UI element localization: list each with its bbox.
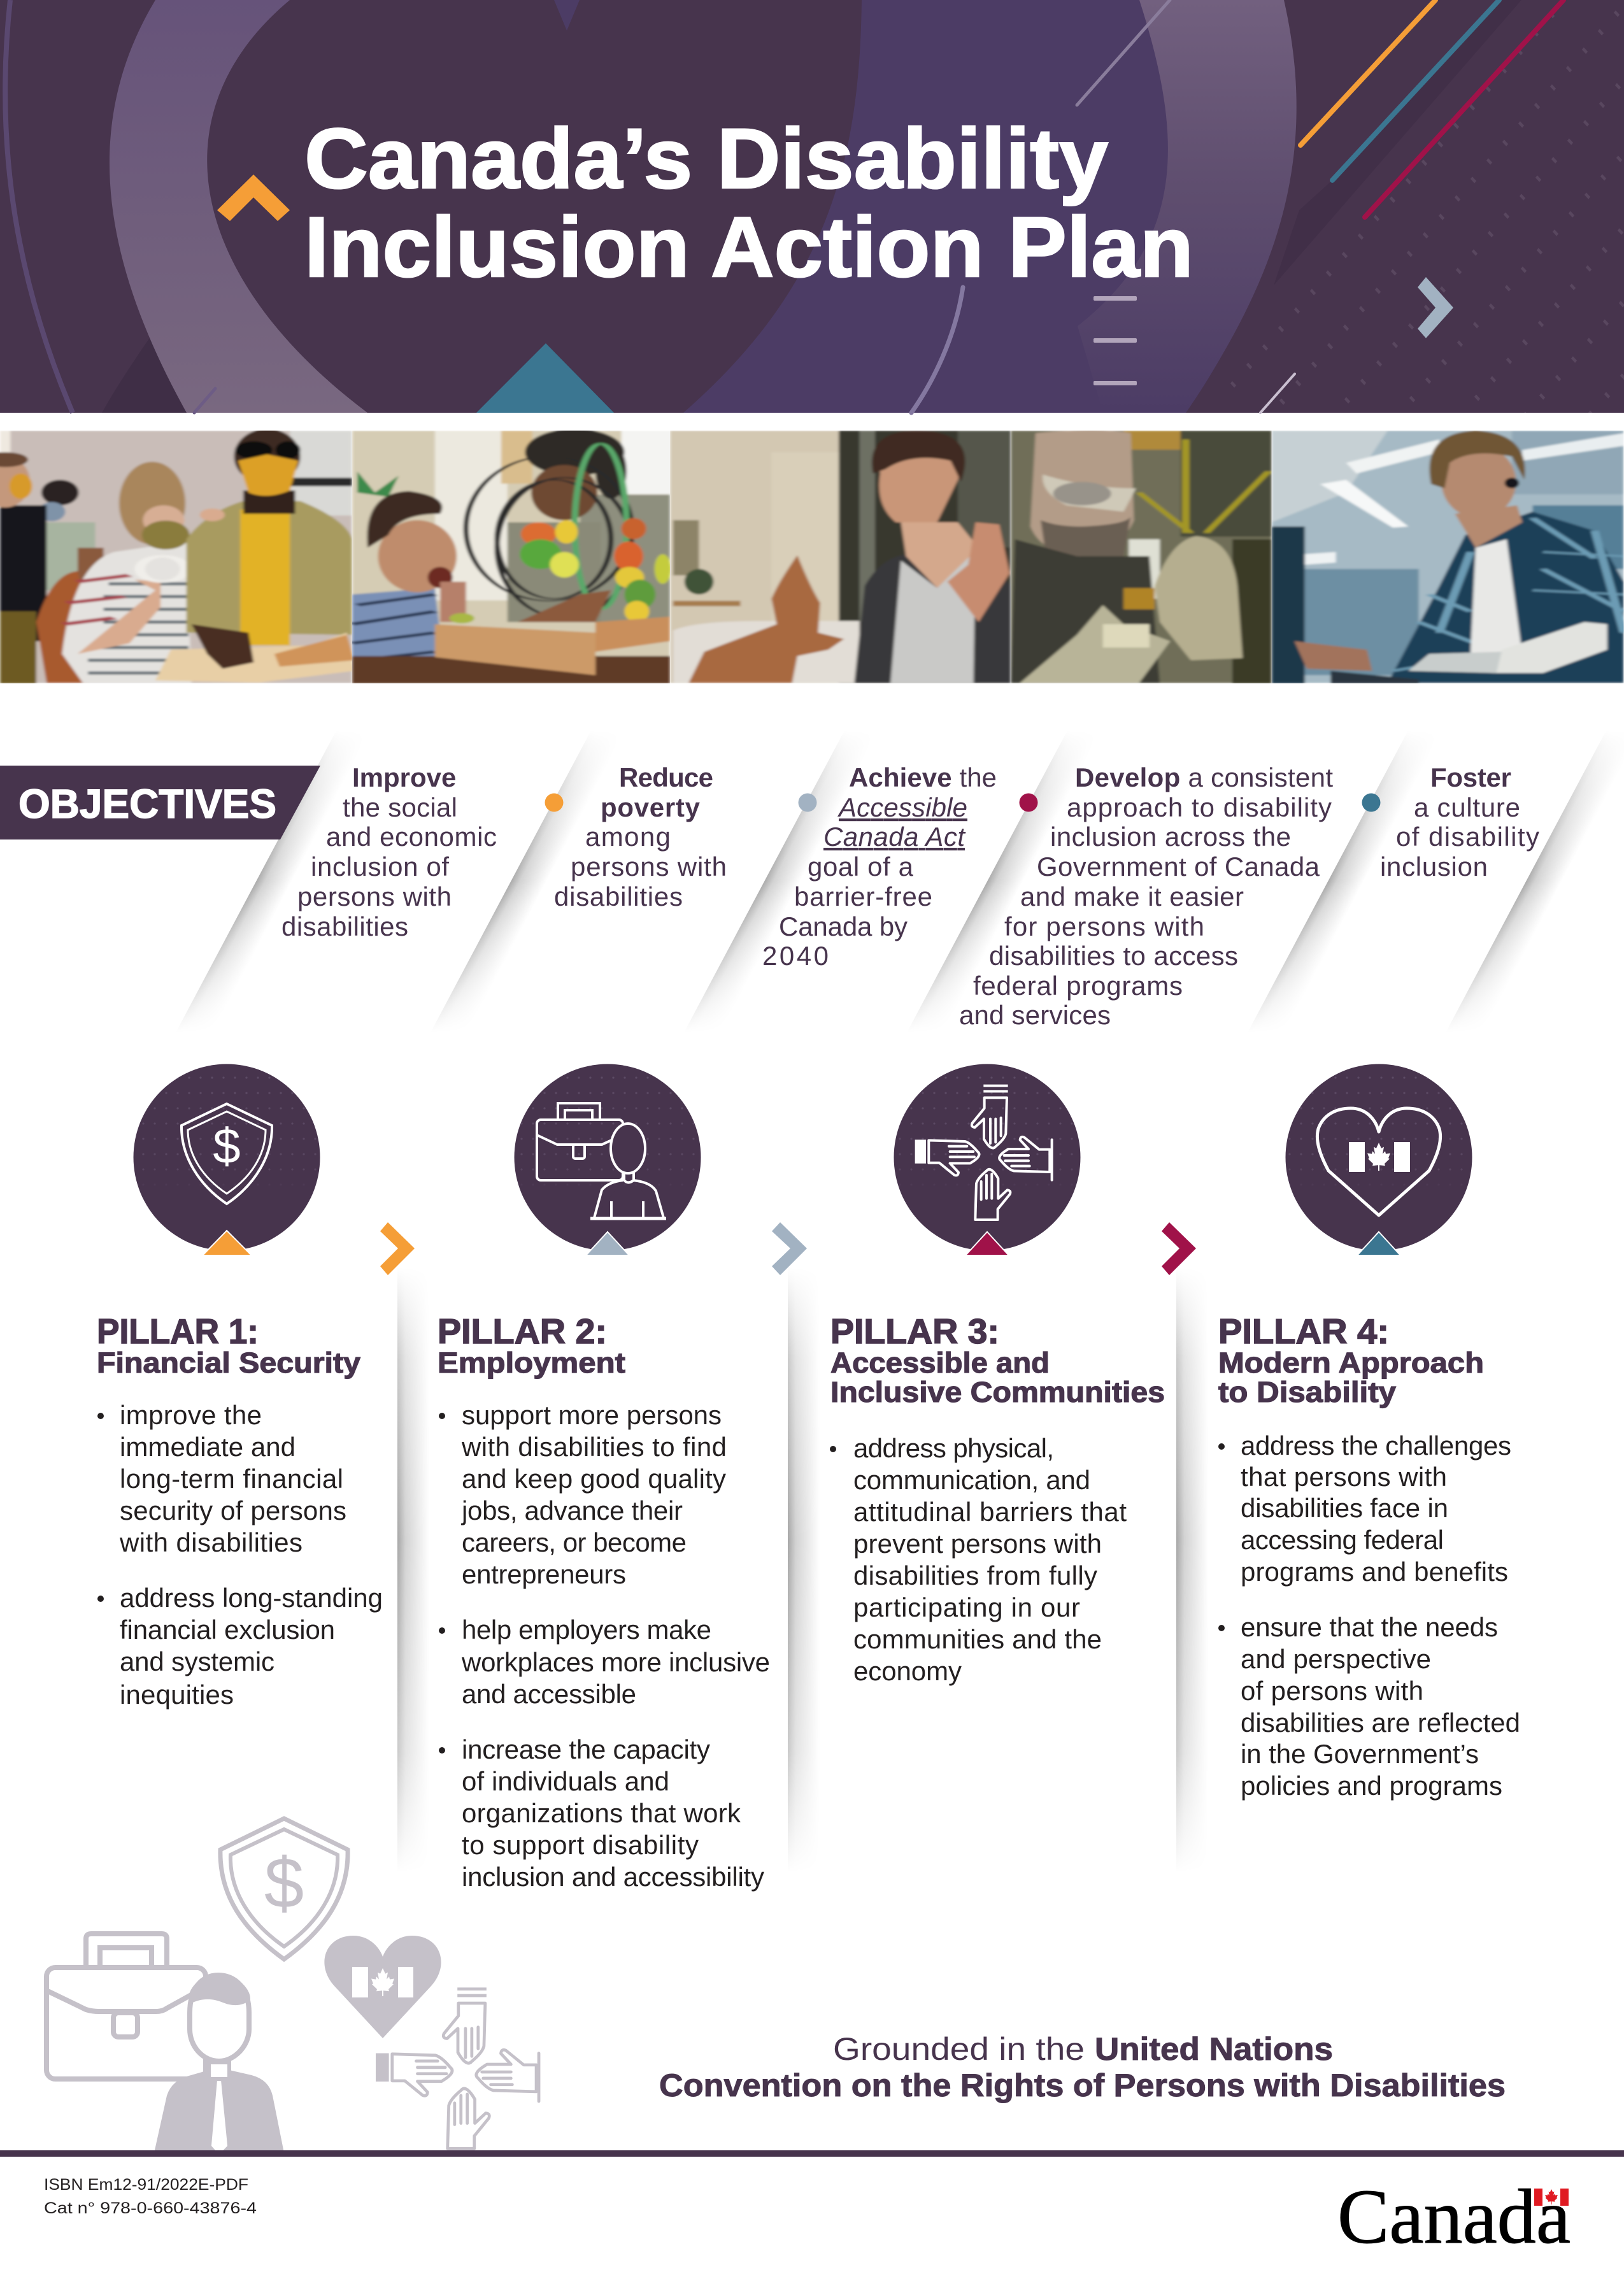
grounded statement xyxy=(659,2031,1506,2103)
publication info: Cat n° 978-0-660-43876-4 xyxy=(44,2199,257,2217)
marker dot teal xyxy=(1362,794,1381,811)
pillar 1 bullets: improve the xyxy=(120,1400,262,1430)
pillar 1 bullets: with disabilities xyxy=(119,1527,303,1557)
pillar 3 bullets: prevent persons with xyxy=(853,1529,1102,1559)
objective 4 text: for persons with xyxy=(1004,911,1204,941)
objective 5 text xyxy=(1380,762,1539,882)
title: Canada’s Disability xyxy=(304,111,1108,206)
pillar 3 bullets: economy xyxy=(853,1656,962,1686)
pillar 2 bullets: support more persons xyxy=(462,1400,722,1430)
icon: orange caret xyxy=(217,175,290,221)
pillar 4 bullets: policies and programs xyxy=(1241,1771,1502,1801)
objective 2 text: disabilities xyxy=(554,882,683,911)
pillar 3 bullets: disabilities from fully xyxy=(853,1561,1097,1590)
pillar 3 bullets: communication, and xyxy=(853,1465,1090,1495)
grounded statement: Grounded in the xyxy=(833,2031,1085,2067)
marker dot grey xyxy=(799,794,816,811)
pillar 2 bullets: of individuals and xyxy=(462,1766,669,1796)
objective 4 text: and services xyxy=(959,1000,1111,1030)
icon: shield circle: $ xyxy=(213,1118,241,1174)
chevron red xyxy=(1162,1222,1196,1275)
objective 4 text: and make it easier xyxy=(1020,882,1244,911)
objective 3 text: 2040 xyxy=(762,941,829,971)
objective 5 text: a culture xyxy=(1414,792,1520,822)
watermark icon: four hands xyxy=(376,1989,539,2148)
objective 3 text: barrier-free xyxy=(794,882,932,911)
pillar 2 bullets: entrepreneurs xyxy=(462,1559,626,1589)
pillar 2 bullets: and accessible xyxy=(462,1679,636,1709)
objective 3 text xyxy=(762,762,997,971)
objectives slanted shadows xyxy=(183,745,1604,1020)
pillar 3 bullets xyxy=(830,1433,1127,1686)
icon: grey chevron xyxy=(1418,277,1453,338)
pillar 3 heading: Accessible and xyxy=(830,1347,1050,1379)
pillar 4 heading: Modern Approach xyxy=(1218,1347,1484,1379)
header banner xyxy=(0,0,1624,413)
photo strip xyxy=(0,429,1624,683)
objective 2 text: Reduce xyxy=(619,762,713,792)
pillar 2 bullets: inclusion and accessibility xyxy=(462,1862,764,1892)
objective 4 text xyxy=(959,762,1333,1030)
chevron orange xyxy=(380,1222,415,1275)
pillar 2 bullets: careers, or become xyxy=(462,1527,687,1557)
pillar 2 heading: Employment xyxy=(438,1347,625,1379)
pillar 4 bullets: in the Government’s xyxy=(1241,1739,1479,1769)
objective 1 text xyxy=(281,762,497,941)
objective 1 text: inclusion of xyxy=(311,852,449,882)
icon: briefcase and person circle xyxy=(515,1064,701,1255)
objectives banner xyxy=(0,766,320,839)
objective 3 text: Canada by xyxy=(779,911,908,941)
pillar 4 heading xyxy=(1218,1311,1484,1408)
Canada wordmark: Canada xyxy=(1337,2174,1571,2260)
pillar 1 heading: Financial Security xyxy=(97,1347,360,1379)
pillar 1 bullets: long-term financial xyxy=(120,1464,343,1494)
marker dot orange xyxy=(545,794,563,811)
objective 1 text: disabilities xyxy=(281,911,408,941)
pillar 4 bullets: and perspective xyxy=(1241,1644,1431,1674)
pillar 2 bullets: and keep good quality xyxy=(462,1464,726,1494)
publication info xyxy=(44,2176,257,2217)
pillar 1 bullets: and systemic xyxy=(120,1647,274,1676)
pillar 3 bullets: participating in our xyxy=(853,1592,1080,1622)
pillar 3 heading: Inclusive Communities xyxy=(830,1376,1165,1408)
footer rule xyxy=(0,2150,1624,2157)
grounded statement: Convention on the Rights of Persons with Disabilities xyxy=(659,2068,1506,2103)
objective 1 text: persons with xyxy=(297,882,452,911)
photo: laughing boy with bead toy xyxy=(352,429,673,683)
pillar 4 bullets: address the challenges xyxy=(1241,1431,1511,1461)
pillar 1 bullets: address long-standing xyxy=(120,1583,383,1613)
photo: man signing OK xyxy=(670,431,1011,683)
objective 4 text: federal programs xyxy=(973,971,1183,1001)
watermark icon: briefcase and person xyxy=(46,1934,284,2153)
objective 2 text xyxy=(554,762,727,911)
title xyxy=(304,111,1193,295)
objective 1 text: and economic xyxy=(326,822,497,852)
pillar 2 heading xyxy=(438,1311,625,1379)
watermark icon: shield xyxy=(220,1818,348,1959)
pillar 3 bullets: address physical, xyxy=(853,1433,1054,1463)
icon: four hands circle xyxy=(894,1064,1080,1255)
pillar 2 bullets xyxy=(439,1400,770,1892)
pillar 4 bullets: of persons with xyxy=(1241,1676,1423,1706)
chevron grey xyxy=(772,1222,807,1275)
objective 3 text: Canada Act xyxy=(823,822,966,852)
pillar 1 heading xyxy=(97,1311,360,1379)
background ring and panel shapes xyxy=(5,0,1624,413)
pillar 2 heading: PILLAR 2: xyxy=(438,1311,607,1351)
pillar 3 heading: PILLAR 3: xyxy=(830,1311,999,1351)
photo: students with masks and book xyxy=(0,429,354,683)
pillar 4 heading: to Disability xyxy=(1218,1376,1396,1408)
pillar 1 bullets xyxy=(97,1400,383,1710)
objective 4 text: approach to disability xyxy=(1067,792,1332,822)
title: Inclusion Action Plan xyxy=(304,200,1193,295)
photo: worker with goggles and gloves xyxy=(1011,430,1272,683)
pillar 1 bullets: inequities xyxy=(120,1680,234,1710)
objective 3 text: goal of a xyxy=(808,852,914,882)
icon: teal triangle xyxy=(476,343,614,413)
pillar 2 bullets: increase the capacity xyxy=(462,1734,710,1764)
pillar 2 bullets: help employers make xyxy=(462,1615,711,1645)
pillar 2 bullets: to support disability xyxy=(462,1830,699,1860)
pillar 2 bullets: with disabilities to find xyxy=(461,1432,727,1462)
pillar 1 bullets: immediate and xyxy=(120,1432,296,1462)
pillar 4 heading: PILLAR 4: xyxy=(1218,1311,1389,1351)
pillar 3 heading xyxy=(830,1311,1165,1408)
watermark icon: heart with flag xyxy=(324,1936,441,2038)
marker dot red xyxy=(1019,794,1038,811)
objective 2 text: persons with xyxy=(571,852,727,882)
objective 5 text: of disability xyxy=(1396,822,1539,852)
pillar 4 bullets: programs and benefits xyxy=(1241,1557,1508,1587)
icon: shield circle xyxy=(134,1064,320,1255)
objective 1 text: Improve xyxy=(352,762,456,792)
icon: heart with flag circle xyxy=(1285,1064,1472,1255)
dashes xyxy=(1093,296,1137,385)
pillar 2 bullets: jobs, advance their xyxy=(460,1496,683,1525)
publication info: ISBN Em12-91/2022E-PDF xyxy=(44,2176,248,2194)
pillar 3 bullets: attitudinal barriers that xyxy=(853,1497,1127,1527)
pillar 4 bullets xyxy=(1218,1431,1520,1801)
thin light lines xyxy=(194,0,1295,413)
objectives banner: OBJECTIVES xyxy=(18,781,276,827)
pillar 1 bullets: security of persons xyxy=(120,1496,346,1525)
pillar 1 bullets: financial exclusion xyxy=(120,1615,335,1645)
pillar 4 bullets: disabilities are reflected xyxy=(1241,1708,1520,1738)
objective 4 text: Government of Canada xyxy=(1037,852,1320,882)
pillar 4 bullets: ensure that the needs xyxy=(1241,1612,1498,1642)
objective 2 text: poverty xyxy=(601,792,701,822)
objective 4 text: inclusion across the xyxy=(1050,822,1291,852)
pillar divider shadows xyxy=(397,1268,1208,1873)
pillar 2 bullets: workplaces more inclusive xyxy=(461,1647,770,1677)
pillar 1 heading: PILLAR 1: xyxy=(97,1311,259,1351)
coloured diagonal lines xyxy=(1300,0,1563,217)
objective 4 text: disabilities to access xyxy=(989,941,1238,971)
pillar 4 bullets: that persons with xyxy=(1241,1462,1447,1492)
photo: woman with prosthetic arm at computer xyxy=(1272,431,1624,683)
pillar 4 bullets: disabilities face in xyxy=(1241,1493,1448,1523)
grounded statement: United Nations xyxy=(1095,2031,1333,2067)
pillar 2 bullets: organizations that work xyxy=(462,1798,741,1828)
objective 3 text: Accessible xyxy=(837,792,967,822)
objective 4 text: Develop a consistent xyxy=(1075,762,1333,792)
objective 3 text: Achieve the xyxy=(849,762,997,792)
objective 5 text: Foster xyxy=(1430,762,1511,792)
objective 1 text: the social xyxy=(343,792,457,822)
pillar 4 bullets: accessing federal xyxy=(1241,1525,1444,1555)
pillar 3 bullets: communities and the xyxy=(853,1624,1102,1654)
watermark icon: shield: $ xyxy=(264,1843,304,1923)
objective 2 text: among xyxy=(585,822,671,852)
objective 5 text: inclusion xyxy=(1380,852,1488,882)
